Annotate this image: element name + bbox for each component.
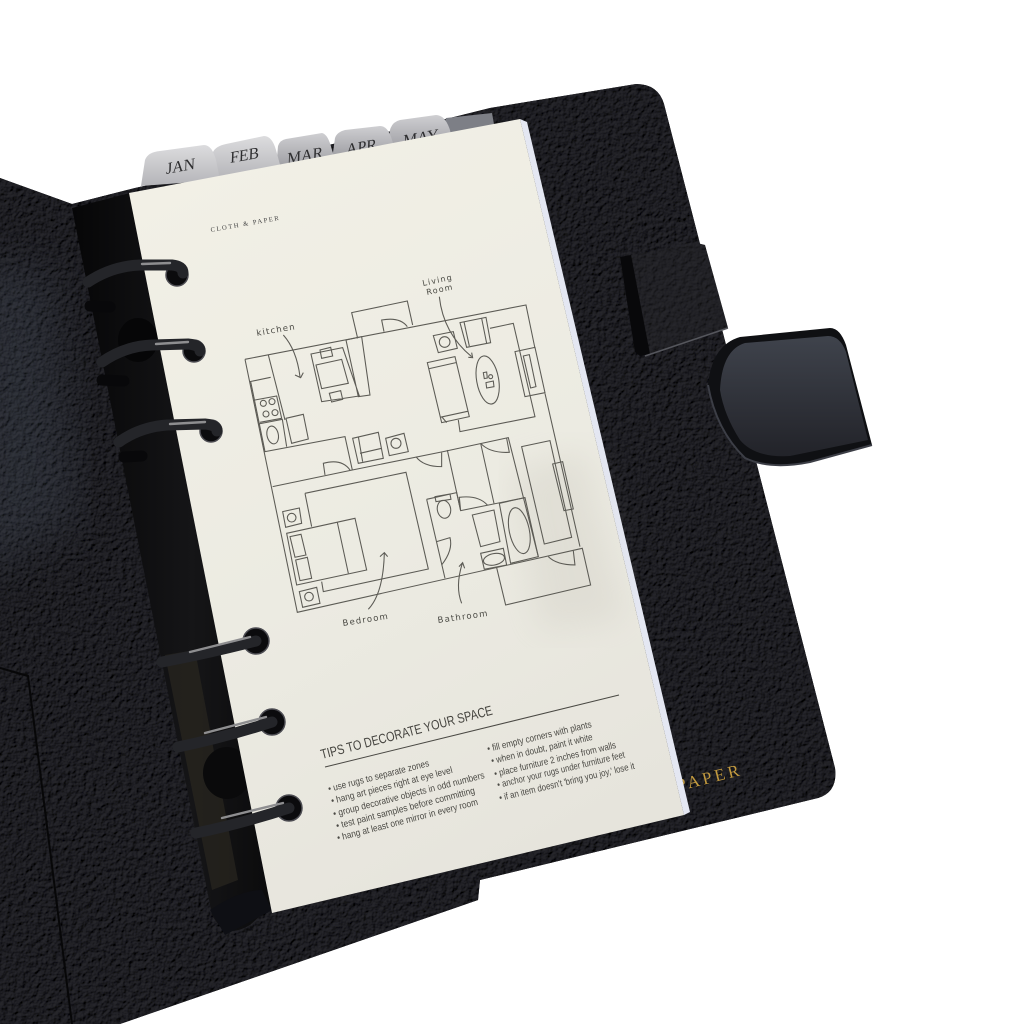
ring 4 — [162, 628, 269, 662]
handwritten room labels — [256, 273, 489, 629]
ring 2 — [102, 340, 205, 381]
handwritten room labels: Living — [422, 273, 454, 288]
tab: JAN — [141, 145, 220, 186]
dining table — [311, 337, 370, 402]
brand text: CLOTH & PAPER — [210, 215, 280, 234]
tab: MAY — [388, 115, 452, 152]
tips list: right column: • fill empty corners with plants — [486, 719, 593, 755]
handwritten room labels: Bedroom — [342, 612, 390, 629]
ring 6 — [196, 795, 302, 833]
tab: JAN: JAN — [166, 156, 196, 178]
binder mechanism — [72, 193, 272, 935]
month tabs — [141, 113, 495, 186]
tab: MAR — [276, 133, 336, 170]
gold foil logo: PAPER — [674, 760, 744, 795]
top balcony — [352, 301, 413, 338]
tips list: left column: • test paint samples before committing — [335, 785, 476, 832]
handwritten room labels: Room — [426, 282, 454, 297]
hallway walls — [273, 432, 575, 565]
tips list: left column: • hang art pieces right at eye level — [330, 765, 454, 807]
tips list: right column: • when in doubt, paint it white — [490, 732, 594, 767]
handwritten room labels: kitchen — [256, 322, 297, 339]
panel: paper insert — [129, 119, 684, 913]
tips list: right column — [486, 719, 636, 804]
annotation arrows — [283, 297, 473, 609]
tab: MAY: MAY — [403, 127, 439, 150]
page stack edge — [520, 119, 690, 815]
tips list: left column: • group decorative objects in odd numbers — [332, 770, 486, 820]
tips list: right column: • anchor your rugs under furniture feet — [496, 750, 626, 791]
pocket stitching — [0, 668, 72, 1024]
tips list: left column: • hang at least one mirror in every room — [336, 797, 479, 844]
floor plan drawing — [245, 297, 591, 612]
tips heading: TIPS TO DECORATE YOUR SPACE — [319, 703, 494, 762]
tips heading — [319, 695, 619, 767]
bedroom — [283, 472, 428, 607]
tips list: right column: • place furniture 2 inches from walls — [493, 740, 617, 780]
bathroom — [427, 493, 538, 578]
living room — [427, 317, 545, 432]
ring 1 — [88, 263, 188, 307]
ring 3 — [119, 420, 222, 457]
tips list: left column: • use rugs to separate zones — [327, 758, 431, 795]
panel: leather planner cover — [0, 84, 835, 1024]
clasp tab — [708, 328, 872, 465]
strap loop — [620, 243, 728, 356]
tab: FEB: FEB — [230, 145, 259, 167]
tab: FEB — [212, 136, 282, 180]
ring 5 — [178, 709, 285, 747]
kitchen — [250, 337, 370, 470]
tab: MAR: MAR — [287, 145, 324, 168]
tab: APR: APR — [346, 136, 377, 159]
tips list: right column: • if an item doesn't 'bring you joy,' lose it — [498, 761, 636, 804]
tips list: left column — [327, 758, 486, 844]
outer walls — [245, 305, 591, 612]
binder rings — [88, 263, 302, 833]
handwritten room labels: Bathroom — [437, 609, 489, 626]
tab: APR — [332, 126, 396, 160]
